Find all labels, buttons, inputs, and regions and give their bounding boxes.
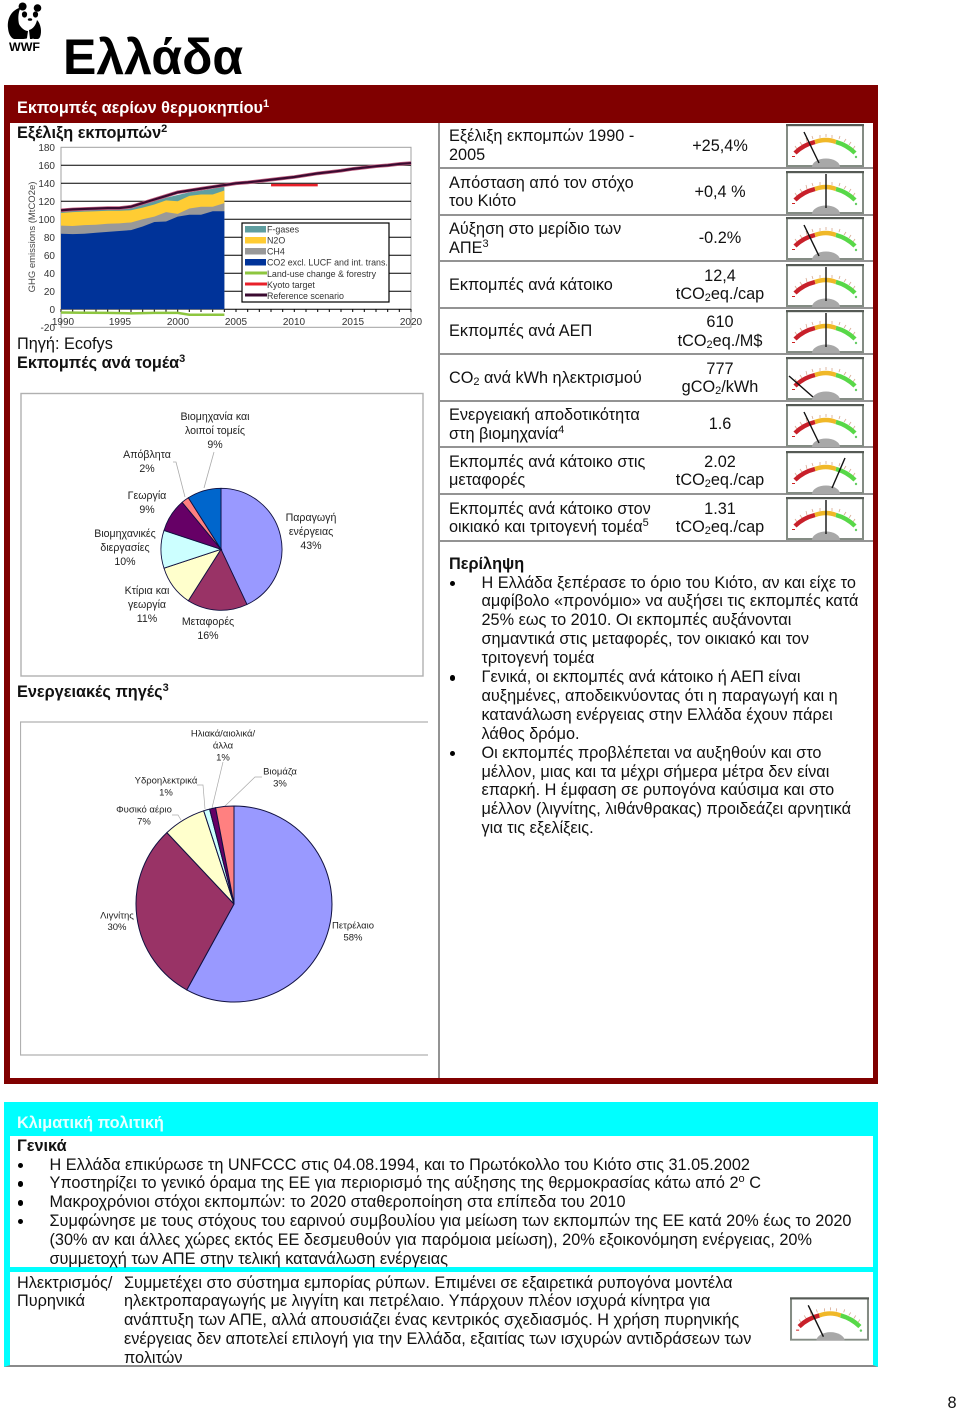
- chart: emissions by sector pie: Κτίρια και: [125, 585, 170, 597]
- chart: energy sources pie: 1%: [159, 788, 173, 798]
- table row: emissions per capita: 12,4: [704, 267, 736, 285]
- text block: summary: κατανάλωση ενέργειας στην Ελλάδα έχουν πάρει: [482, 706, 833, 724]
- text block: summary: Περίληψη: [449, 555, 524, 573]
- y axis labels: 60: [44, 251, 55, 262]
- text block: general policy: Υποστηρίζει το γενικό όραμα της ΕΕ για περιορισμό της αύξησης της θερμοκρασίας κάτω από 2ο C: [50, 1173, 761, 1192]
- heading: energy sources: Ενεργειακές πηγές3: [17, 682, 169, 700]
- text block: summary: μέλλον, μιας και τα μέχρι σήμερα μέτρα δεν είναι: [482, 763, 829, 781]
- x axis labels: 1990: [52, 317, 75, 328]
- title: Ελλάδα: [63, 29, 243, 85]
- table row: emissions per GDP: tCO2eq./M$: [678, 332, 762, 351]
- text block: general policy: Η Ελλάδα επικύρωσε τη UNFCCC στις 04.08.1994, και το Πρωτόκολλο του Κιότο στις 31.05.2002: [50, 1156, 750, 1174]
- text block: electricity and nuclear policy: ενέργειας δεν αποτελεί επιλογή για την Ελλάδα, εξαιτίας των ισχυρών αντιδράσεων των: [124, 1330, 751, 1348]
- icon: WWF panda logo: WWF: [9, 40, 40, 54]
- text block: summary: λάθος δρόμο.: [482, 725, 580, 743]
- chart: emissions by sector pie: διεργασίες: [100, 542, 150, 554]
- label: electricity and nuclear: [17, 1274, 112, 1310]
- table row: emissions per GDP: [439, 308, 873, 355]
- chart: energy sources pie: 30%: [107, 922, 127, 933]
- table row: distance from Kyoto: [439, 169, 873, 216]
- table row: household and tertiary emissions: 1.31: [704, 500, 736, 518]
- table row: CO2 per kWh: CO2 ανά kWh ηλεκτρισμού: [449, 369, 642, 388]
- x axis labels: 2020: [400, 317, 423, 328]
- table row: CO2 per kWh: 777: [706, 360, 734, 378]
- table row: emissions per capita: Εκπομπές ανά κάτοικο: [449, 276, 613, 294]
- text block: general policy: (30% αν και άλλες χώρες εκτός ΕΕ δεσμευθούν για παρόμοια μείωση), 20% εξοικονόμηση ενέργειας, 20%: [50, 1231, 812, 1249]
- chart: energy sources pie: 3%: [273, 778, 287, 790]
- y axis labels: 40: [44, 269, 55, 280]
- legend: N2O: [267, 236, 285, 246]
- y axis title: GHG emissions (MtCO2e): [27, 182, 38, 292]
- text block: summary: σημαντικά στις μεταφορές, τον οικιακό και τον: [482, 630, 809, 648]
- y axis labels: 180: [38, 143, 55, 154]
- chart: emissions by sector pie: λοιποί τομείς: [185, 425, 245, 437]
- chart: energy sources pie: 58%: [343, 932, 363, 944]
- panel heading: climate policy: Κλιματική πολιτική: [17, 1114, 164, 1132]
- chart: energy sources pie: 1%: [216, 752, 230, 764]
- table row: household and tertiary emissions: tCO2eq./cap: [676, 518, 764, 537]
- chart: emissions by sector pie: 9%: [139, 504, 155, 516]
- table row: transport emissions per capita: μεταφορές: [449, 471, 525, 489]
- text block: summary: αυξημένες, αποδεικνύοντας ότι η παραγωγή και η: [482, 687, 838, 705]
- chart: emissions by sector pie: 9%: [207, 439, 223, 451]
- text block: electricity and nuclear policy: πολιτών: [124, 1349, 183, 1367]
- heading: emissions by sector: Εκπομπές ανά τομέα3: [17, 352, 185, 372]
- chart: emissions by sector pie: 16%: [197, 630, 219, 642]
- text block: summary: τριτογενή τομέα: [482, 649, 594, 667]
- table row: household and tertiary emissions: Εκπομπές ανά κάτοικο στον: [449, 500, 651, 518]
- chart: energy sources pie: 7%: [137, 816, 151, 828]
- table row: household and tertiary emissions: [439, 494, 873, 542]
- vertical panel divider: [438, 123, 440, 1078]
- table row: energy efficiency in industry: [439, 402, 873, 448]
- chart: emissions by sector pie: [20, 392, 424, 677]
- x axis labels: 1995: [109, 317, 132, 328]
- text block: summary: Οι εκπομπές προβλέπεται να αυξηθούν και στο: [482, 744, 821, 762]
- table row: emissions evolution: Εξέλιξη εκπομπών 1990 -: [449, 127, 634, 145]
- chart: energy sources pie: Λιγνίτης: [100, 910, 134, 922]
- label: electricity and nuclear: Ηλεκτρισμός/: [17, 1274, 112, 1292]
- text block: summary: [449, 555, 858, 837]
- cyan divider band: [4, 1267, 878, 1272]
- legend: CO2 excl. LUCF and int. trans.: [267, 258, 388, 268]
- table row: emissions evolution: 2005: [449, 146, 485, 164]
- table row: emissions per GDP: Εκπομπές ανά ΑΕΠ: [449, 322, 592, 340]
- y axis labels: [38, 143, 55, 334]
- stacked areas: [61, 163, 411, 315]
- text block: summary: επαρκή. Η έμφαση σε ρυπογόνα καύσιμα και στο: [482, 781, 834, 799]
- y axis labels: -20: [41, 323, 55, 334]
- table row: renewables share: ΑΠΕ3: [449, 238, 489, 257]
- chart: GHG emissions area chart: [27, 143, 423, 334]
- legend: CH4: [267, 246, 285, 256]
- table row: renewables share: [439, 216, 873, 262]
- y axis labels: 0: [49, 305, 55, 316]
- chart: emissions by sector pie: 2%: [139, 463, 155, 475]
- text block: summary: αμφίβολο «προνόμιο» να αυξήσει τις εκπομπές κατά: [482, 592, 858, 610]
- text block: general policy: [17, 1137, 851, 1268]
- chart: energy sources pie: άλλα: [213, 740, 234, 752]
- table row: emissions per GDP: 610: [706, 313, 734, 331]
- y axis labels: 160: [38, 161, 55, 172]
- chart: emissions by sector pie: γεωργία: [128, 599, 166, 611]
- table row: emissions per capita: tCO2eq./cap: [676, 285, 764, 304]
- icon: gauge for electricity policy: [790, 1297, 869, 1341]
- x axis labels: 2005: [225, 317, 248, 328]
- legend: Reference scenario: [267, 291, 344, 301]
- heading: emissions evolution: Εξέλιξη εκπομπών2: [17, 122, 167, 142]
- chart: energy sources pie: Φυσικό αέριο: [116, 804, 172, 816]
- y axis labels: 120: [38, 197, 55, 208]
- legend: [242, 223, 389, 302]
- table row: renewables share: Αύξηση στο μερίδιο των: [449, 220, 621, 238]
- y axis labels: 20: [44, 287, 55, 298]
- table row: emissions per capita: [439, 262, 873, 308]
- table row: energy efficiency in industry: 1.6: [709, 415, 731, 433]
- chart: emissions by sector pie: Μεταφορές: [182, 616, 234, 628]
- text block: summary: μέλλον (λιγνίτης, λιθάνθρακας) προιδεάζει αρνητικά: [482, 800, 851, 818]
- table row: CO2 per kWh: gCO2/kWh: [682, 378, 758, 397]
- chart: emissions by sector pie: Γεωργία: [128, 490, 166, 502]
- x axis labels: 2015: [342, 317, 365, 328]
- text block: electricity and nuclear policy: Συμμετέχει στο σύστημα εμπορίας ρύπων. Επιμένει σε εξαιρετικά ρυπογόνα μοντέλα: [124, 1274, 732, 1292]
- y axis labels: 100: [38, 215, 55, 226]
- chart: emissions by sector pie: Απόβλητα: [123, 449, 171, 461]
- chart: energy sources pie: Πετρέλαιο: [332, 920, 374, 932]
- table row: emissions evolution: +25,4%: [692, 137, 748, 155]
- table row: transport emissions per capita: [439, 448, 873, 494]
- text block: summary: Η Ελλάδα ξεπέρασε το όριο του Κιότο, αν και είχε το: [482, 574, 856, 592]
- y axis labels: 80: [44, 233, 55, 244]
- panel: greenhouse gas emissions: [4, 85, 878, 1084]
- panel heading: greenhouse gas emissions: Εκπομπές αερίων θερμοκηπίου1: [17, 98, 269, 116]
- chart: emissions by sector pie: 43%: [300, 540, 322, 552]
- text block: general policy: Μακροχρόνιοι στόχοι εκπομπών: το 2020 σταθεροποίηση στα επίπεδα του 2010: [50, 1193, 626, 1211]
- table row: CO2 per kWh: [439, 355, 873, 402]
- text block: summary: Γενικά, οι εκπομπές ανά κάτοικο ή ΑΕΠ είναι: [482, 668, 800, 686]
- chart: energy sources pie: Ηλιακά/αιολικά/: [191, 728, 256, 740]
- text block: electricity and nuclear policy: ηλεκτροπαραγωγής με λιγγίτη και πετρέλαιο. Υπάρχουν πλέον ισχυρά κίνητρα για: [124, 1292, 710, 1310]
- text block: general policy: συμμετοχή των ΑΠΕ στην τελική κατανάλωση ενέργειας: [50, 1250, 448, 1268]
- text block: electricity and nuclear policy: ανάπτυξη των ΑΠΕ, αλλά απουσιάζει ένας κεντρικός σχεδιασμός. Η χρήση πυρηνικής: [124, 1311, 739, 1329]
- table row: distance from Kyoto: Απόσταση από τον στόχο: [449, 174, 634, 192]
- table row: transport emissions per capita: 2.02: [704, 453, 736, 471]
- icon: WWF panda logo: [8, 2, 42, 54]
- table row: emissions evolution: [439, 123, 873, 169]
- table row: distance from Kyoto: του Κιότο: [449, 192, 516, 210]
- chart: emissions by sector pie: 11%: [137, 613, 158, 625]
- y axis labels: 140: [38, 179, 55, 190]
- chart: energy sources pie: Βιομάζα: [263, 766, 297, 778]
- chart: energy sources pie: Υδροηλεκτρικά: [135, 776, 198, 786]
- legend: Kyoto target: [267, 280, 315, 290]
- text block: electricity and nuclear policy: [124, 1274, 751, 1367]
- table row: energy efficiency in industry: στη βιομηχανία4: [449, 424, 564, 443]
- chart: emissions by sector pie: Βιομηχανικές: [94, 528, 156, 540]
- table row: transport emissions per capita: Εκπομπές ανά κάτοικο στις: [449, 453, 645, 471]
- x axis labels: [52, 317, 423, 328]
- text block: summary: για τις εξελίξεις.: [482, 819, 594, 837]
- label: electricity and nuclear: Πυρηνικά: [17, 1292, 85, 1310]
- chart: emissions by sector pie: Παραγωγή: [286, 512, 336, 524]
- x axis labels: 2000: [167, 317, 190, 328]
- table row: renewables share: -0.2%: [699, 229, 741, 247]
- text block: summary: 25% εως το 2010. Οι εκπομπές αυξάνονται: [482, 611, 791, 629]
- text block: general policy: Συμφώνησε με τους στόχους του εαρινού συμβουλίου για μείωση των εκπομπών της ΕΕ κατά 20% έως το 2020: [50, 1212, 851, 1230]
- legend: Land-use change & forestry: [267, 269, 377, 279]
- table row: energy efficiency in industry: Ενεργειακή αποδοτικότητα: [449, 406, 640, 424]
- chart: emissions by sector pie: 10%: [114, 556, 136, 568]
- x axis labels: 2010: [283, 317, 306, 328]
- chart: emissions by sector pie: Βιομηχανία και: [180, 411, 250, 423]
- table row: household and tertiary emissions: οικιακό και τριτογενή τομέα5: [449, 517, 649, 536]
- chart: emissions by sector pie: ενέργειας: [289, 526, 333, 538]
- panel: climate policy: [4, 1102, 878, 1367]
- legend: F-gases: [267, 224, 300, 234]
- table row: distance from Kyoto: +0,4 %: [694, 183, 746, 201]
- chart: energy sources pie: [20, 721, 428, 1056]
- source note: Πηγή: Ecofys: [17, 334, 113, 352]
- text block: general policy: Γενικά: [17, 1137, 67, 1155]
- table row: transport emissions per capita: tCO2eq./cap: [676, 471, 764, 490]
